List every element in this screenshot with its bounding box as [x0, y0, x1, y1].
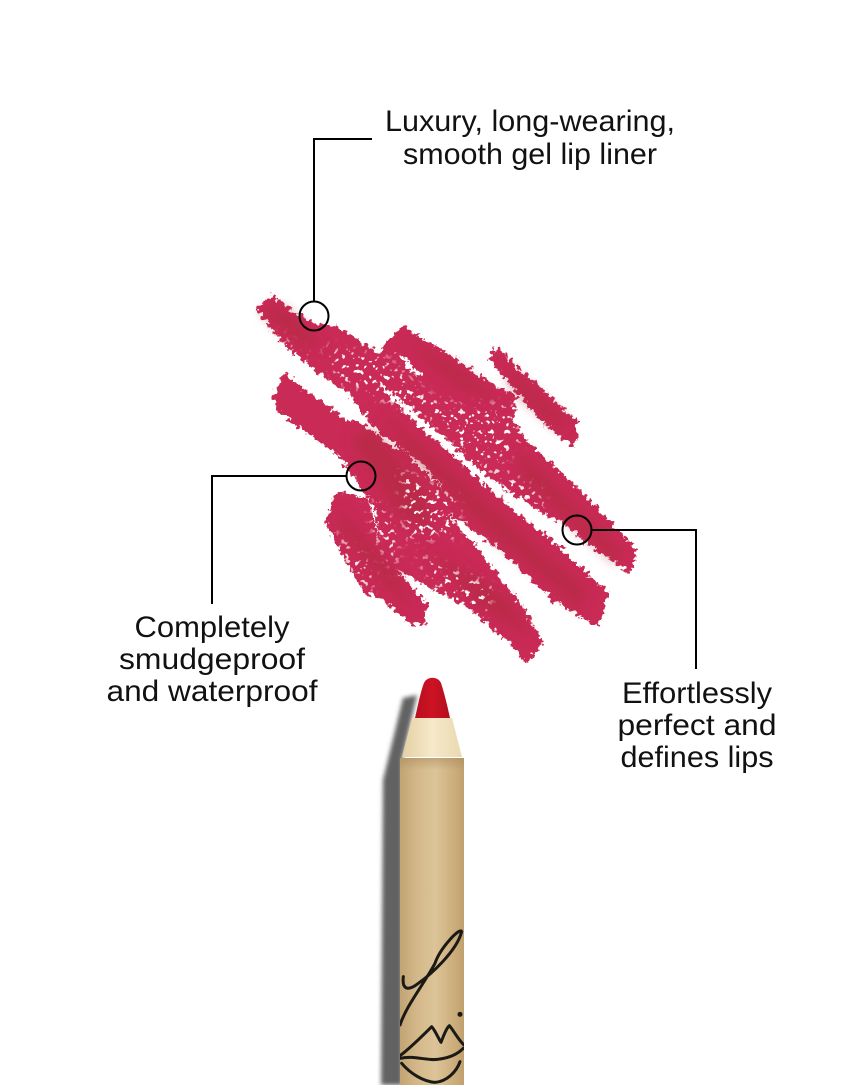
label text: Completely	[134, 611, 290, 644]
lip liner swatch	[0, 0, 637, 663]
pencil cast shadow	[381, 695, 417, 1085]
pencil barrel	[400, 758, 464, 1085]
callout: defines lips: perfect and	[618, 709, 776, 742]
leader line	[592, 530, 696, 669]
callout: smudgeproof	[106, 462, 376, 708]
marker circle	[562, 516, 592, 544]
swatch texture gaps	[273, 330, 547, 627]
infographic	[108, 110, 774, 1085]
marker circle	[346, 462, 376, 490]
callout: defines lips: defines lips	[620, 741, 774, 774]
leader line	[314, 139, 372, 301]
callout: smooth gel: smooth gel lip liner	[403, 138, 657, 171]
pencil tip	[415, 678, 450, 718]
callout: smooth gel	[300, 105, 675, 330]
pencil logo	[400, 931, 464, 1082]
pencil wood	[402, 718, 462, 757]
leader line	[212, 476, 347, 604]
label text: Effortlessly	[622, 677, 772, 710]
lip liner pencil	[400, 678, 464, 1085]
callout: defines lips	[562, 516, 776, 774]
callout: smudgeproof: smudgeproof	[119, 643, 306, 676]
marker circle	[300, 302, 328, 330]
callout: smudgeproof: and waterproof	[106, 675, 318, 708]
label text: Luxury, long-wearing,	[385, 105, 675, 138]
